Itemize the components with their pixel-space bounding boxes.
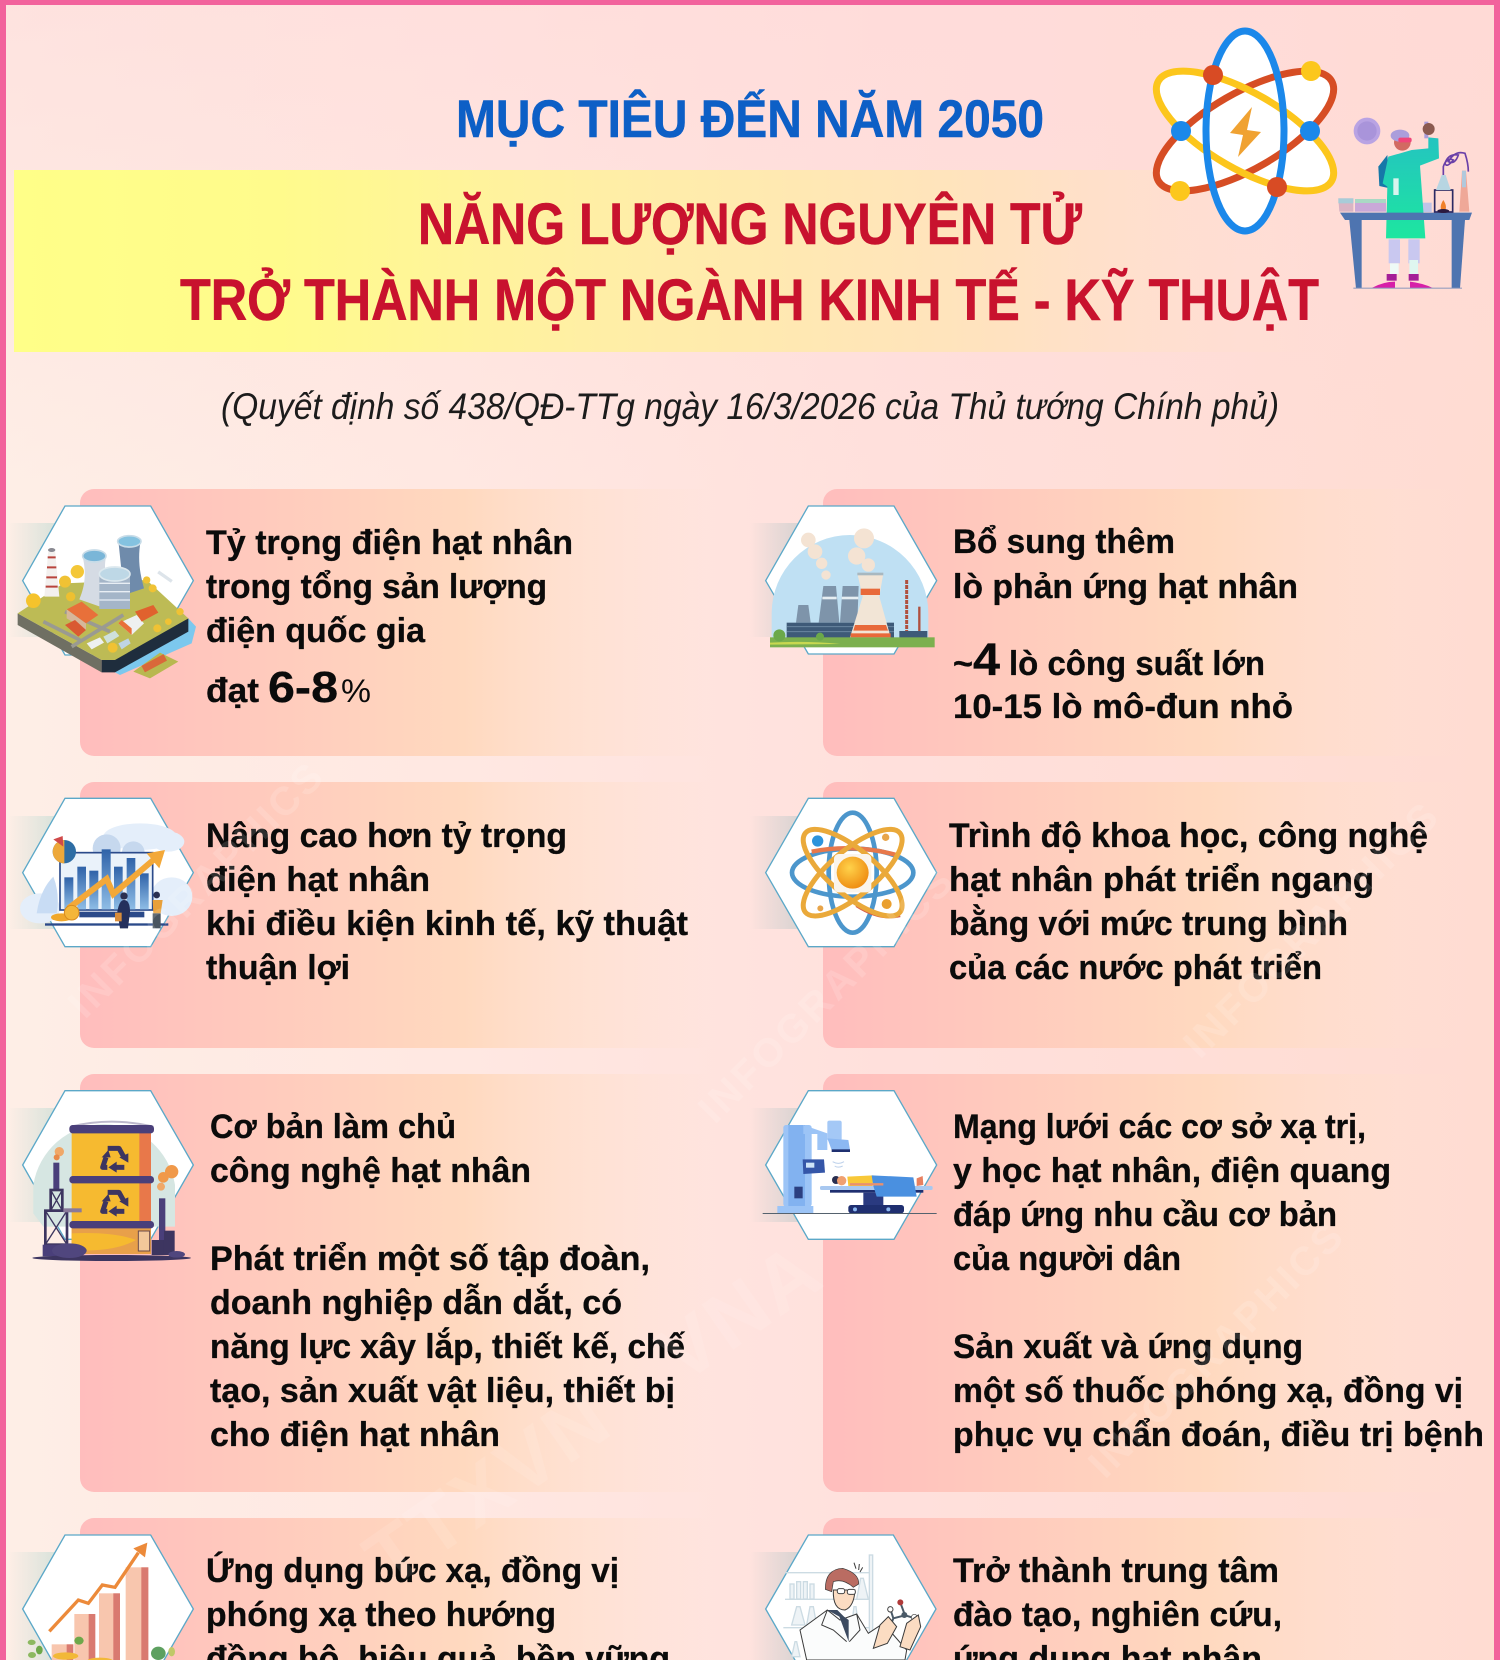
subtitle: legal reference: (Quyết định số 438/QĐ-TTg ngày 16/3/2026 của Thủ tướng Chính phủ) xyxy=(221,386,1279,427)
text: nuclear medicine network: phục vụ chẩn đoán, điều trị bệnh xyxy=(953,1416,1484,1454)
watermark: infographics ttxvn: TTXVN - VNA xyxy=(349,1224,838,1604)
panel: mastering nuclear technology xyxy=(8,1074,720,1492)
title: blue heading: MỤC TIÊU ĐẾN NĂM 2050 xyxy=(456,88,1044,149)
text: nuclear share goal: % xyxy=(341,673,371,709)
icon: rising bars with arrow and coins xyxy=(23,1535,193,1660)
text: mastering nuclear technology: doanh nghiệp dẫn dắt, có xyxy=(210,1284,622,1322)
panel: training and research centre xyxy=(750,1518,1463,1660)
text: nuclear share goal: Tỷ trọng điện hạt nhân xyxy=(206,524,573,562)
text: nuclear medicine network: đáp ứng nhu cầu cơ bản xyxy=(953,1196,1337,1234)
text: additional reactors xyxy=(953,523,1298,726)
text: radiation and isotope applications: phóng xạ theo hướng xyxy=(206,1596,556,1634)
text: additional reactors: 10-15 lò mô-đun nhỏ xyxy=(953,688,1293,726)
text: radiation and isotope applications: Ứng dụng bức xạ, đồng vị xyxy=(206,1552,619,1590)
icon: cooling towers with smoke xyxy=(766,506,937,654)
icon shadow block xyxy=(750,816,810,929)
icon: isometric nuclear plant xyxy=(18,506,196,678)
text: additional reactors: Bổ sung thêm xyxy=(953,523,1175,561)
watermark: infographics ttxvn: INFOGRAPHICS xyxy=(690,858,964,1131)
text: mastering nuclear technology: Cơ bản làm chủ xyxy=(210,1108,456,1146)
text: nuclear medicine network: một số thuốc phóng xạ, đồng vị xyxy=(953,1372,1463,1410)
title: red line two: TRỞ THÀNH MỘT NGÀNH KINH TẾ - KỸ THUẬT xyxy=(180,268,1319,333)
text: science and technology level: của các nước phát triển xyxy=(949,949,1322,987)
text: additional reactors: lò phản ứng hạt nhân xyxy=(953,568,1298,606)
watermark: infographics ttxvn: INFOGRAPHICS xyxy=(1175,793,1449,1066)
text: additional reactors: lò công suất lớn xyxy=(1009,645,1265,683)
text: mastering nuclear technology: Phát triển một số tập đoàn, xyxy=(210,1240,650,1278)
text: raising nuclear share: điện hạt nhân xyxy=(206,861,430,899)
icon shadow block xyxy=(750,1552,810,1660)
text: mastering nuclear technology: cho điện hạt nhân xyxy=(210,1416,500,1454)
text: raising nuclear share xyxy=(206,817,688,987)
text: additional reactors: ~ xyxy=(953,645,973,683)
text: additional reactors: 4 xyxy=(973,634,1000,685)
text: raising nuclear share: khi điều kiện kinh tế, kỹ thuật xyxy=(206,905,688,943)
text: nuclear share goal: trong tổng sản lượng xyxy=(206,568,547,606)
text: mastering nuclear technology: công nghệ hạt nhân xyxy=(210,1152,531,1190)
text: training and research centre: Trở thành trung tâm xyxy=(953,1552,1279,1590)
text: nuclear share goal: đạt xyxy=(206,672,259,710)
icon shadow block xyxy=(8,1552,68,1660)
text: nuclear medicine network: y học hạt nhân, điện quang xyxy=(953,1152,1391,1190)
icon shadow block xyxy=(8,523,68,637)
text: science and technology level xyxy=(949,817,1428,987)
icon shadow block xyxy=(8,1108,68,1222)
icon shadow block xyxy=(750,1108,810,1222)
panel: nuclear medicine network xyxy=(750,1074,1484,1492)
icon: radiotherapy machine with patient xyxy=(763,1091,937,1239)
text: science and technology level: hạt nhân phát triển ngang xyxy=(949,861,1374,899)
icon: colourful atom xyxy=(766,798,937,947)
panel: additional nuclear reactors xyxy=(750,489,1463,756)
watermark: infographics ttxvn: INFOGRAPHICS xyxy=(60,753,334,1026)
highlighted title band xyxy=(14,170,1334,352)
icon shadow block xyxy=(750,523,810,637)
text: raising nuclear share: Nâng cao hơn tỷ trọng xyxy=(206,817,567,855)
text: nuclear medicine network: Sản xuất và ứng dụng xyxy=(953,1328,1303,1366)
text: radiation and isotope applications xyxy=(206,1552,670,1660)
text: nuclear share goal: 6-8 xyxy=(268,663,338,712)
text: science and technology level: Trình độ khoa học, công nghệ xyxy=(949,817,1428,855)
watermark: infographics ttxvn: INFOGRAPHICS xyxy=(1080,1213,1354,1486)
text: raising nuclear share: thuận lợi xyxy=(206,949,350,987)
text: mastering nuclear technology: tạo, sản xuất vật liệu, thiết bị xyxy=(210,1372,675,1410)
text: nuclear share goal xyxy=(206,524,573,712)
watermark: infographics ttxvn xyxy=(60,753,1449,1604)
icon shadow block xyxy=(8,816,68,929)
text: training and research centre xyxy=(953,1552,1282,1660)
icon: atom with lightning bolt xyxy=(1139,31,1351,231)
text: science and technology level: bằng với mức trung bình xyxy=(949,905,1348,943)
panel: raising nuclear share xyxy=(8,782,720,1048)
panel: radiation and isotope applications xyxy=(8,1518,720,1660)
panel: nuclear share of national electricity xyxy=(8,489,720,756)
icon: growth chart with business people xyxy=(20,798,193,947)
text: mastering nuclear technology: năng lực xây lắp, thiết kế, chế xyxy=(210,1328,685,1366)
text: nuclear medicine network xyxy=(953,1108,1484,1454)
title: red line one: NĂNG LƯỢNG NGUYÊN TỬ xyxy=(418,192,1083,257)
icon: scientist at lab table xyxy=(1338,118,1472,289)
panel: science and technology level xyxy=(750,782,1463,1048)
icon: nuclear waste barrel with recycling marks xyxy=(23,1091,193,1261)
icon: scientist holding molecule xyxy=(766,1535,936,1660)
text: nuclear medicine network: của người dân xyxy=(953,1240,1181,1278)
text: nuclear medicine network: Mạng lưới các cơ sở xạ trị, xyxy=(953,1108,1366,1146)
text: mastering nuclear technology xyxy=(210,1108,685,1454)
text: training and research centre: đào tạo, nghiên cứu, xyxy=(953,1596,1282,1634)
text: nuclear share goal: điện quốc gia xyxy=(206,612,426,650)
